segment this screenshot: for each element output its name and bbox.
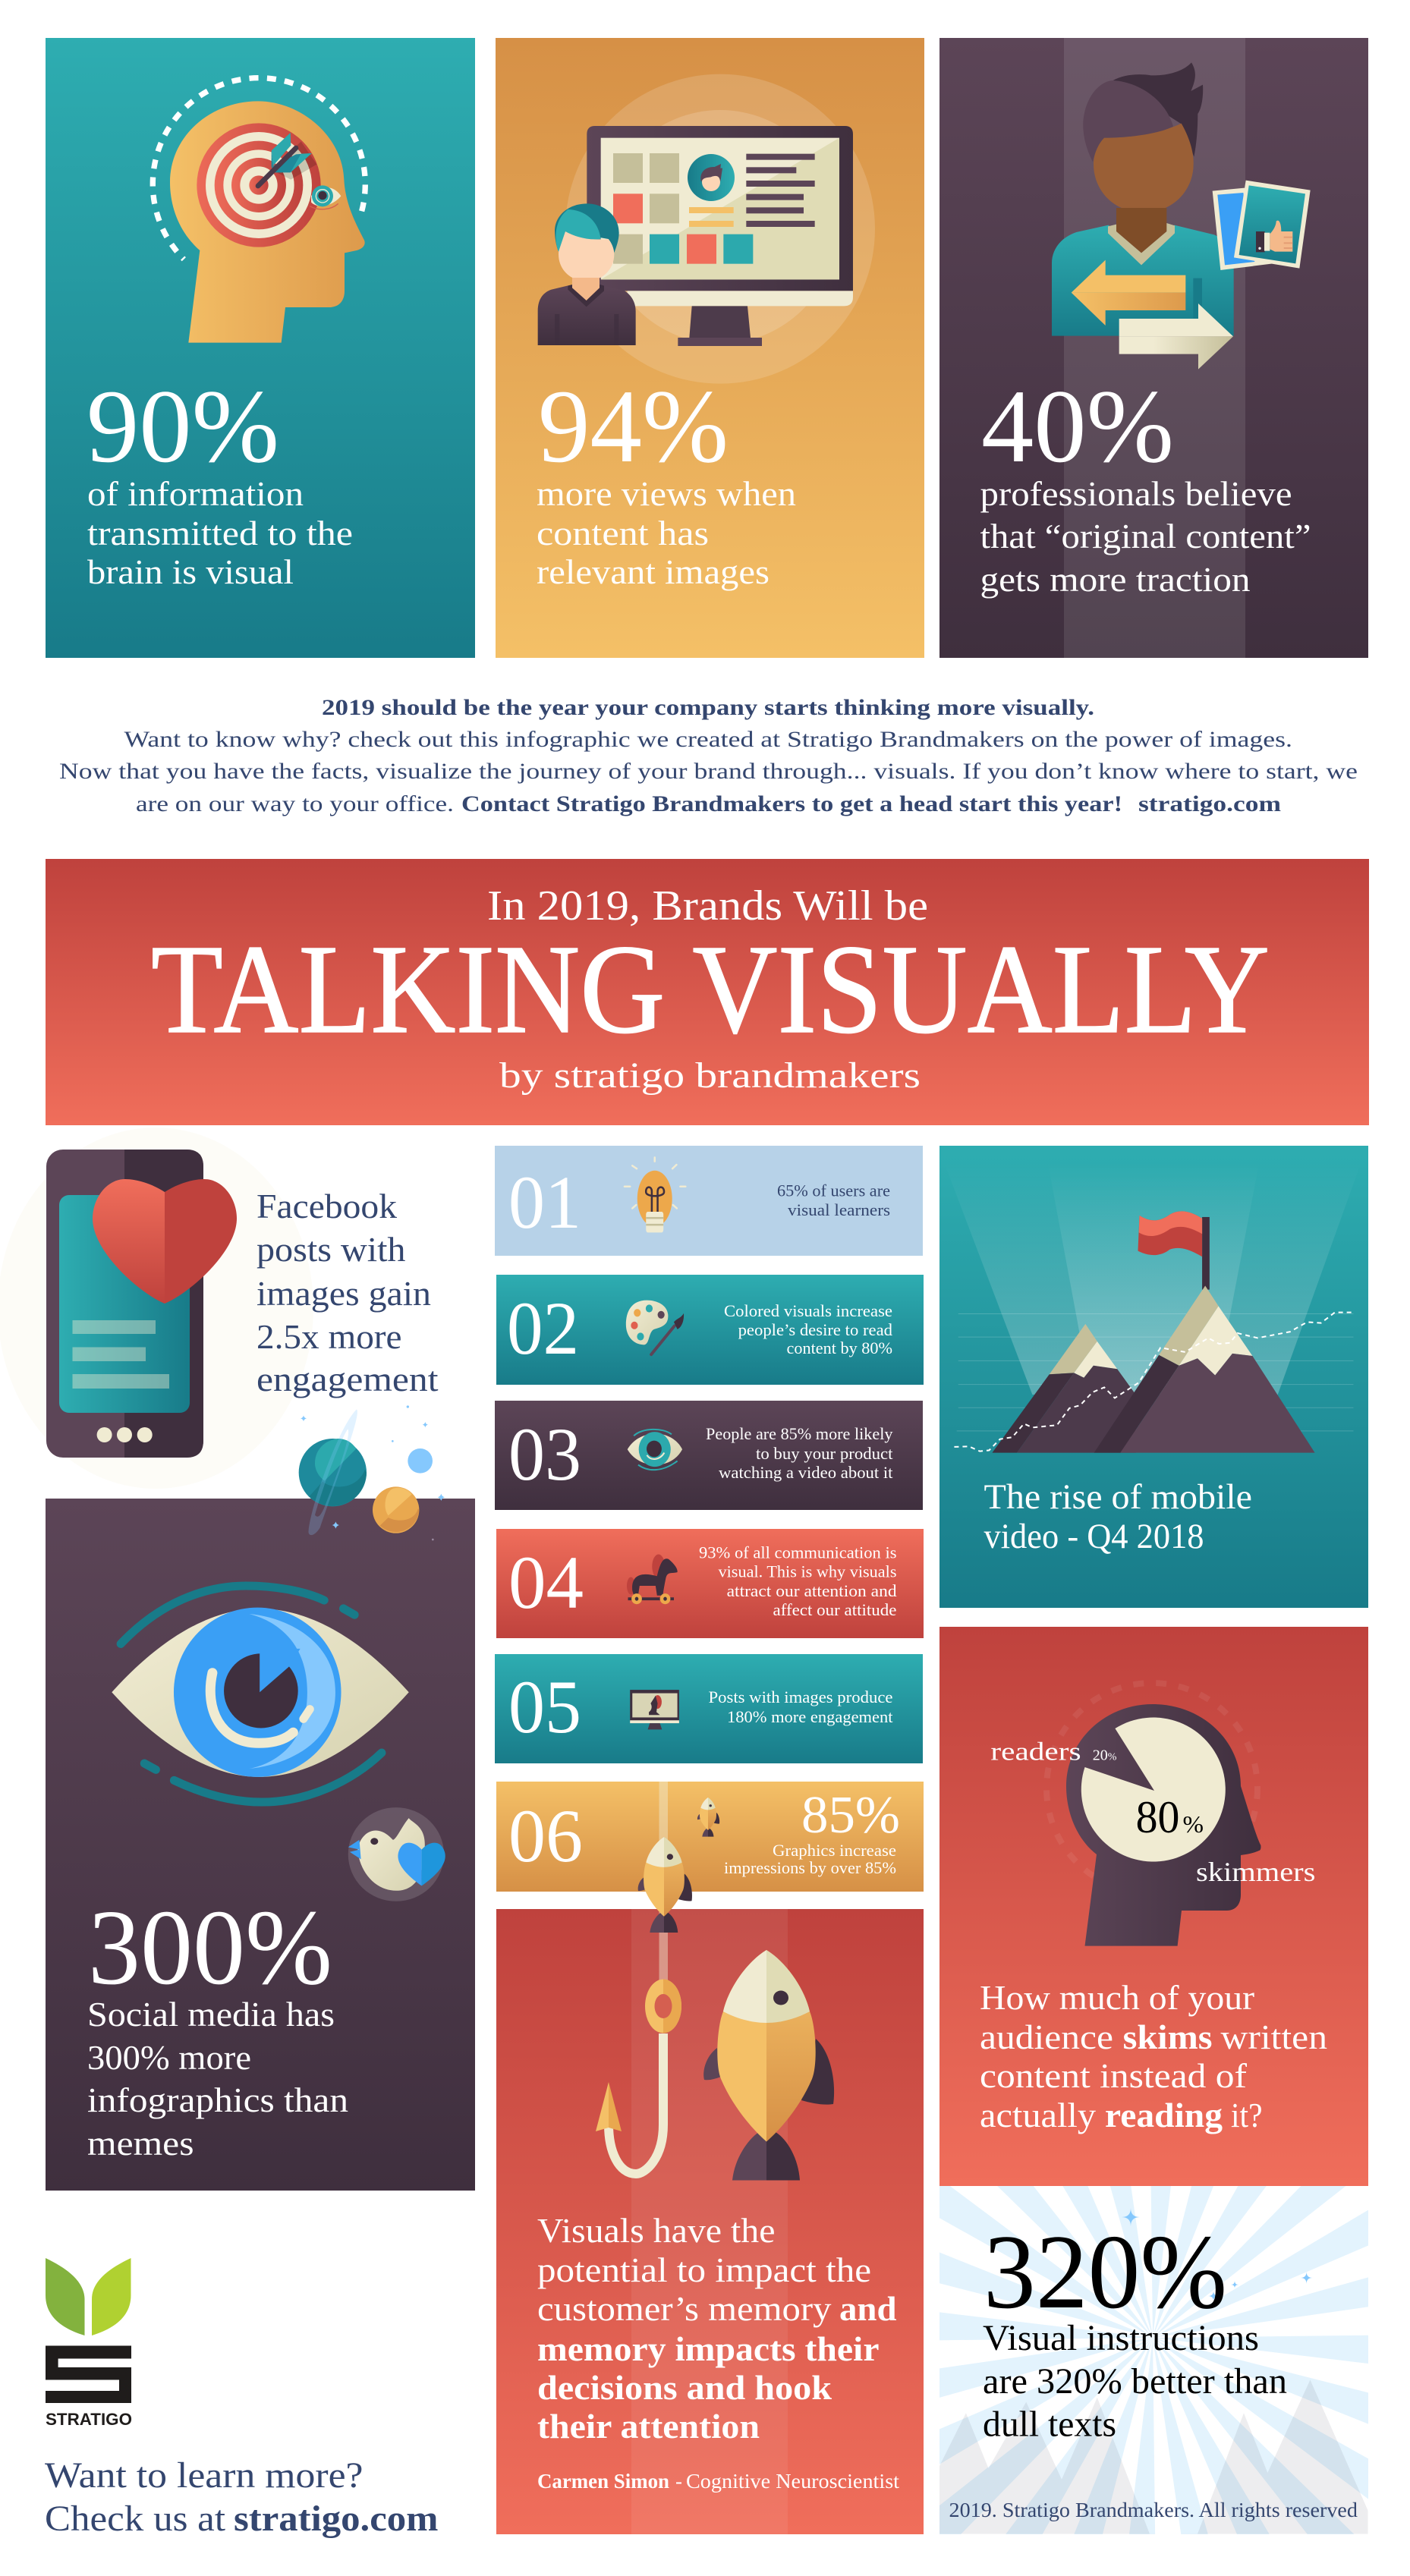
- icon: big eye: [112, 1586, 409, 1802]
- text block: intro paragraph: 2019 should be the year your company starts thinking more visually.: [322, 695, 1094, 720]
- icon: head with pie chart: [1066, 1704, 1261, 1946]
- text: quote: customer’s memory: [537, 2289, 832, 2328]
- text: skimming question: [980, 1978, 1327, 2134]
- row 04: affect our attitude: [773, 1600, 897, 1619]
- icon: mini monitor: [630, 1690, 679, 1729]
- row 01: visual learners: [788, 1200, 890, 1219]
- row 04: attract our attention and: [727, 1581, 897, 1600]
- text block: intro paragraph: stratigo.com: [1138, 791, 1281, 816]
- text: attribution: [537, 2470, 900, 2493]
- background mountains: [939, 2379, 1368, 2534]
- icon: tiny fish: [697, 1798, 719, 1837]
- panel: 94% more views: [496, 38, 924, 658]
- text: 94% description: [537, 474, 796, 591]
- text block: intro paragraph: Now that you have the facts, visualize the journey of your brand through... visuals. If you don’t know where to start, we: [59, 759, 1358, 784]
- stat: 90%: 90%: [87, 368, 279, 484]
- icon: fishing line, hook and fish: [596, 1782, 692, 2174]
- text: quote: decisions and hook: [537, 2368, 832, 2407]
- text block: intro paragraph: [59, 695, 1358, 816]
- text: 90% description: transmitted to the: [87, 514, 353, 552]
- row 01: 65% of users are: [777, 1181, 890, 1200]
- icon: big fish: [703, 1950, 834, 2181]
- text: call to action: Check us at: [45, 2499, 226, 2539]
- row 04: 04: [508, 1540, 584, 1625]
- text: facebook stat: posts with: [257, 1230, 405, 1269]
- stat: 320%: 320%: [984, 2213, 1227, 2331]
- row 01: [495, 1146, 923, 1256]
- text: rise of mobile caption: video - Q4 2018: [984, 1517, 1204, 1556]
- text: 40% description: gets more traction: [980, 560, 1251, 599]
- text: call to action: Want to learn more?: [45, 2455, 363, 2496]
- panel: 90% of information: [46, 38, 475, 658]
- panel: 40% professionals: [939, 38, 1368, 658]
- row 02: Colored visuals increase: [724, 1301, 892, 1320]
- icon: small eye: [628, 1430, 682, 1470]
- text: skimming question: reading: [1105, 2096, 1223, 2134]
- text: skimming question: How much of your: [980, 1978, 1254, 2017]
- text: facebook stat: engagement: [257, 1360, 439, 1398]
- text: 40% description: that “original content”: [980, 517, 1311, 555]
- text: skimming question: written: [1220, 2018, 1327, 2056]
- row 05: Posts with images produce: [709, 1687, 892, 1706]
- decorative pale backdrop: [0, 1128, 313, 1489]
- banner: title: [46, 859, 1369, 1125]
- row 03: People are 85% more likely: [706, 1424, 892, 1443]
- row 06: impressions by over 85%: [724, 1858, 896, 1877]
- panel: 320% visual instructions: [939, 2186, 1368, 2534]
- text: 40% description: professionals believe: [980, 474, 1292, 513]
- text: rise of mobile caption: The rise of mobile: [984, 1477, 1252, 1517]
- text: skimming question: skims: [1123, 2018, 1213, 2056]
- row 03: [495, 1401, 923, 1510]
- text: skimming question: it?: [1231, 2096, 1263, 2134]
- row 04: [496, 1529, 924, 1638]
- text: 320% description: dull texts: [983, 2405, 1116, 2445]
- text: facebook stat: Facebook: [257, 1187, 397, 1225]
- label: skimmers: skimmers: [1196, 1857, 1315, 1887]
- row 02: content by 80%: [786, 1338, 892, 1357]
- text: 320% description: [983, 2318, 1287, 2445]
- row 04: 93% of all communication is: [699, 1543, 897, 1562]
- text: 320% description: Visual instructions: [983, 2318, 1259, 2358]
- icon: light bulb: [625, 1158, 685, 1232]
- text: 300% description: Social media has: [87, 1995, 335, 2033]
- row 05: [495, 1654, 923, 1763]
- text: call to action: [45, 2455, 439, 2539]
- row 03: 03: [508, 1412, 581, 1496]
- text: skimming question: content instead of: [980, 2056, 1248, 2095]
- text: quote: and: [839, 2289, 897, 2328]
- heading: talking visually: TALKING VISUALLY: [151, 919, 1270, 1060]
- logo: stratigo: [46, 2258, 132, 2429]
- stat: 40%: 40%: [981, 368, 1174, 484]
- icon: planets and sparkles: [299, 1405, 445, 1540]
- heading: in 2019: In 2019, Brands Will be: [487, 882, 928, 929]
- text: 320% description: are 320% better than: [983, 2361, 1287, 2401]
- row 06: 06: [508, 1794, 583, 1878]
- row 03: to buy your product: [756, 1444, 892, 1463]
- text: call to action: stratigo.com: [234, 2499, 439, 2539]
- row 05: 05: [508, 1665, 581, 1749]
- icon: sparkles: [1122, 2208, 1313, 2301]
- text: copyright: 2019. Stratigo Brandmakers. All rights reserved: [949, 2499, 1358, 2521]
- text: facebook stat: [257, 1187, 439, 1398]
- text: 94% description: content has: [537, 514, 709, 552]
- text: 300% description: [87, 1995, 348, 2162]
- text: 40% description: [980, 474, 1311, 599]
- text: 90% description: of information: [87, 474, 304, 513]
- text: facebook stat: 2.5x more: [257, 1317, 402, 1356]
- stat: 300%: 300%: [88, 1887, 332, 2007]
- label: readers: readers: [990, 1738, 1081, 1766]
- panel: 300% social media: [46, 1499, 475, 2191]
- panel: visuals and memory: [496, 1909, 924, 2534]
- text: quote: memory impacts their: [537, 2329, 879, 2368]
- text: attribution: Carmen Simon: [537, 2470, 669, 2493]
- row 03: watching a video about it: [719, 1463, 892, 1482]
- row 05: 180% more engagement: [727, 1707, 892, 1726]
- text block: intro paragraph: Want to know why? check out this infographic we created at Stratigo Brandmakers on the power of images.: [124, 727, 1292, 752]
- icon: monitor and person: [538, 74, 875, 384]
- text: attribution: -: [675, 2470, 682, 2493]
- text: 94% description: more views when: [537, 474, 796, 513]
- stat: 94%: 94%: [538, 368, 729, 484]
- text: 300% description: 300% more: [87, 2038, 251, 2077]
- text: rise of mobile caption: [984, 1477, 1252, 1556]
- icon: palette and brush: [626, 1301, 684, 1354]
- text: 94% description: relevant images: [537, 552, 770, 591]
- row 02: [496, 1275, 924, 1385]
- text: facebook stat: images gain: [257, 1274, 431, 1313]
- icon: bird with heart: [348, 1807, 445, 1901]
- text: quote: [537, 2211, 897, 2445]
- icon: trojan horse: [627, 1555, 678, 1604]
- row 02: people’s desire to read: [738, 1320, 892, 1339]
- text block: intro paragraph: are on our way to your office.: [136, 791, 454, 816]
- logo: stratigo: STRATIGO: [46, 2410, 132, 2429]
- row 02: 02: [507, 1286, 579, 1370]
- icon: phone with heart: [46, 1150, 237, 1458]
- heading: byline: by stratigo brandmakers: [499, 1055, 921, 1096]
- label: 80%: [1136, 1792, 1204, 1842]
- chart: mountains with trend line: [944, 1162, 1361, 1453]
- icon: head with target and dashed arc: [153, 78, 365, 343]
- label: 80%: 80: [1136, 1792, 1179, 1842]
- icon: person with arrows and photos: [1052, 62, 1311, 370]
- text: 300% description: infographics than: [87, 2081, 348, 2119]
- panel: skimmers versus readers: [939, 1627, 1368, 2186]
- text: attribution: Cognitive Neuroscientist: [686, 2470, 900, 2493]
- text block: intro paragraph: Contact Stratigo Brandmakers to get a head start this year!: [461, 791, 1122, 816]
- row 06: Graphics increase: [773, 1841, 896, 1860]
- text: 90% description: [87, 474, 353, 591]
- text: quote: their attention: [537, 2407, 760, 2445]
- label: 20%: 20%: [1093, 1747, 1117, 1763]
- text: 300% description: memes: [87, 2124, 194, 2162]
- row 01: 01: [508, 1160, 581, 1244]
- row 06: [496, 1782, 924, 1892]
- text: 90% description: brain is visual: [87, 552, 294, 591]
- text: skimming question: actually: [980, 2096, 1096, 2134]
- label: 80%: %: [1182, 1810, 1204, 1838]
- row 04: visual. This is why visuals: [718, 1562, 897, 1581]
- stat: 85%: 85%: [801, 1786, 900, 1845]
- panel: rise of mobile video: [939, 1146, 1368, 1608]
- text: quote: Visuals have the: [537, 2211, 776, 2250]
- text: quote: potential to impact the: [537, 2250, 871, 2289]
- text: skimming question: audience: [980, 2018, 1113, 2056]
